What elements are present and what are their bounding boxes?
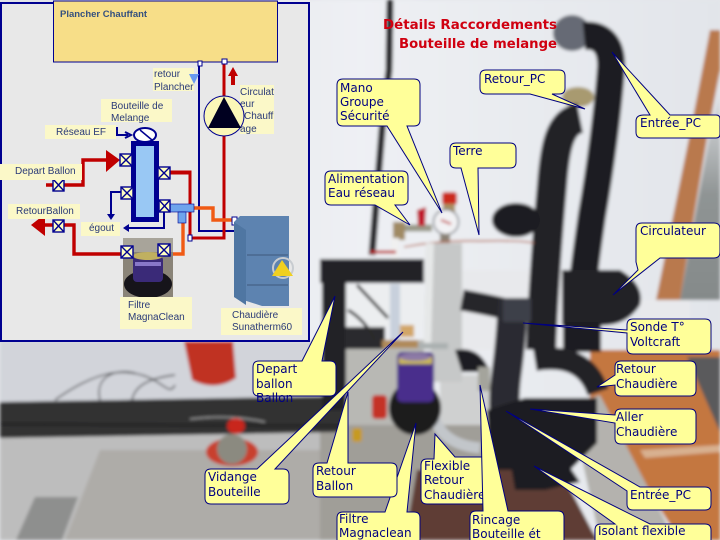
T fitting [170, 204, 194, 223]
callout: Depart ballon: Depart [256, 362, 298, 376]
callout: Depart ballon: Ballon [256, 391, 293, 405]
callout: Depart ballon: ballon [256, 377, 293, 391]
red rinse valve [455, 349, 490, 372]
callout: Rincage Bouteille [470, 385, 564, 540]
title [383, 17, 557, 52]
flexible hose [435, 420, 480, 448]
sensor tube [504, 300, 513, 450]
label: bouteille de melange: Melange [111, 113, 150, 124]
label: egout: égout [89, 223, 114, 234]
label: circulateur: eur [240, 99, 255, 110]
pipes: orange boiler lines [170, 208, 232, 254]
arrow: return flow [189, 74, 199, 84]
label: retour ballon [8, 204, 80, 219]
red handle and yellow tab [372, 395, 387, 419]
panel: hydraulic schematic [0, 1, 309, 341]
grey clutter beneath bottle [345, 340, 425, 425]
arrow: depart ballon [106, 150, 120, 172]
black vertical tube on wall [372, 0, 390, 255]
callout: Retour Chaudière [597, 361, 696, 396]
label: circulateur: Circulat [240, 87, 274, 98]
lower circulator blob [562, 270, 641, 325]
label: circulateur: Chauff [244, 111, 274, 122]
callout: Retour_PC: Retour_PC [484, 72, 545, 86]
callout: Sonde T° Voltcraft: Voltcraft [630, 335, 681, 349]
callout: Flexible Retour Chaudière: Chaudière [424, 488, 485, 502]
callout: Mano Groupe Sécurité [337, 79, 442, 213]
red drain valve [206, 418, 258, 466]
callout: Entrée_PC top [612, 52, 720, 138]
central floor [320, 420, 600, 540]
circulator body [492, 203, 540, 237]
label: retour plancher [153, 68, 194, 93]
icon: circulator pump [204, 96, 244, 136]
connector squares at boiler [188, 217, 240, 241]
underfloor heating block [54, 1, 278, 62]
label: depart ballon: Depart Ballon [15, 166, 76, 177]
wires [55, 372, 175, 400]
icon: valve on top of bottle [134, 128, 156, 142]
lower left floor [0, 430, 345, 540]
mixing bottle [131, 141, 159, 222]
earth wire [404, 241, 534, 247]
arrow: supply flow [228, 67, 238, 85]
pipes: red depart ballon [46, 160, 108, 185]
label: filtre magnaclean [120, 297, 192, 329]
title: Bouteille de melange [399, 36, 557, 52]
callout: Flexible Retour Chaudière: Retour [424, 473, 464, 487]
callout: Aller Chaudière: Aller [616, 410, 643, 424]
callout: Circulateur [613, 223, 720, 295]
callout: Flexible Retour Chaudière [421, 434, 488, 504]
callout: Entrée_PC top: Entrée_PC [640, 116, 701, 130]
arrow: mains water [117, 127, 131, 138]
callout: Filtre Magnaclean [337, 423, 420, 540]
callout: Rincage Bouteille: Rincage [472, 513, 520, 527]
arrow: drain down [107, 214, 115, 220]
callout: Circulateur: Circulateur [640, 224, 706, 238]
label: chaudiere: Sunatherm60 [232, 322, 292, 333]
label: reseau EF: Réseau EF [56, 127, 106, 138]
pipes: drain to egout [126, 212, 164, 228]
callout: Filtre Magnaclean: Filtre [339, 512, 368, 526]
valves [53, 154, 170, 258]
callout: Retour Chaudière: Chaudière [616, 377, 677, 391]
callout: Mano Groupe Sécurité: Groupe [340, 95, 384, 109]
label: retour ballon: RetourBallon [16, 206, 74, 217]
connector squares [198, 59, 227, 66]
callout: Terre [450, 143, 516, 235]
arrow: retour ballon [31, 214, 45, 236]
callout: Retour Ballon: Ballon [316, 479, 353, 493]
title: Détails Raccordements [383, 17, 557, 33]
callout: Flexible Retour Chaudière: Flexible [424, 459, 470, 473]
wooden door frame [656, 30, 720, 300]
label: filtre magnaclean: Filtre [128, 300, 151, 311]
callout: Aller Chaudière [530, 409, 696, 444]
return pipe [562, 87, 594, 107]
pipes: red bottle outlet [168, 173, 190, 176]
label: egout [81, 222, 120, 236]
callout: Retour Ballon [313, 392, 397, 497]
top pipe bend with grey tape [553, 15, 591, 51]
callout: Entrée_PC bottom [506, 411, 711, 510]
callout: Vidange Bouteille [205, 332, 403, 504]
label: circulateur: age [240, 124, 257, 135]
pipes: red supply line [170, 62, 224, 238]
arrow: egout [123, 224, 129, 232]
callout: Retour Chaudière: Retour [616, 362, 656, 376]
label: circulateur [240, 85, 274, 135]
callout: Filtre Magnaclean: Magnaclean [339, 526, 412, 540]
extinguisher [184, 341, 236, 386]
photo: magnaclean filter [123, 238, 173, 298]
callout: Retour Ballon: Retour [316, 464, 356, 478]
callout: Alimentation Eau réseau [325, 171, 410, 225]
callout: Retour_PC [480, 70, 585, 109]
label: bouteille de melange: Bouteille de [111, 101, 164, 112]
callout: Sonde T° Voltcraft [523, 319, 711, 354]
callout: Mano Groupe Sécurité: Sécurité [340, 109, 390, 123]
label: reseau EF [45, 125, 116, 139]
right floor tiles [590, 350, 720, 540]
mixing bottle [423, 243, 462, 382]
label: chaudiere [221, 308, 302, 335]
callout: Entrée_PC bottom: Entrée_PC [630, 488, 691, 502]
pipes: blue return line [199, 64, 235, 231]
brass fittings [382, 340, 418, 348]
callout: Mano Groupe Sécurité: Mano [340, 81, 373, 95]
pipes: red retour ballon [43, 225, 121, 254]
boiler hoses [535, 359, 598, 392]
callout: Aller Chaudière: Chaudière [616, 425, 677, 439]
photo: boiler [234, 216, 293, 306]
safety group [442, 192, 457, 205]
callout: Sonde T° Voltcraft: Sonde T° [630, 320, 685, 334]
label: retour plancher: retour [154, 69, 181, 80]
lower left wall [0, 341, 345, 411]
callout: Alimentation Eau réseau: Eau réseau [328, 186, 395, 200]
callout: Isolant flexible: Isolant flexible [598, 524, 685, 538]
callout: Alimentation Eau réseau: Alimentation [328, 172, 405, 186]
magnaclean filter [389, 381, 441, 435]
label: depart ballon [0, 164, 82, 180]
label: chaudiere: Chaudière [232, 310, 279, 321]
label: retour plancher: Plancher [154, 82, 194, 93]
pipes: drain [111, 192, 122, 216]
label: bouteille de melange [101, 99, 172, 124]
callout: Isolant flexible [534, 466, 711, 540]
callout: Terre: Terre [452, 144, 482, 158]
callout: Vidange Bouteille: Bouteille [208, 485, 261, 499]
white wall lower right [462, 270, 590, 350]
callout: Vidange Bouteille: Vidange [208, 470, 257, 484]
underfloor heating block: Plancher Chauffant [60, 9, 148, 20]
long black pipe [0, 396, 345, 438]
pipes around bottle [320, 259, 424, 283]
label: filtre magnaclean: MagnaClean [128, 312, 185, 323]
grey door panel [680, 90, 720, 300]
callout: Depart ballon [253, 296, 336, 405]
